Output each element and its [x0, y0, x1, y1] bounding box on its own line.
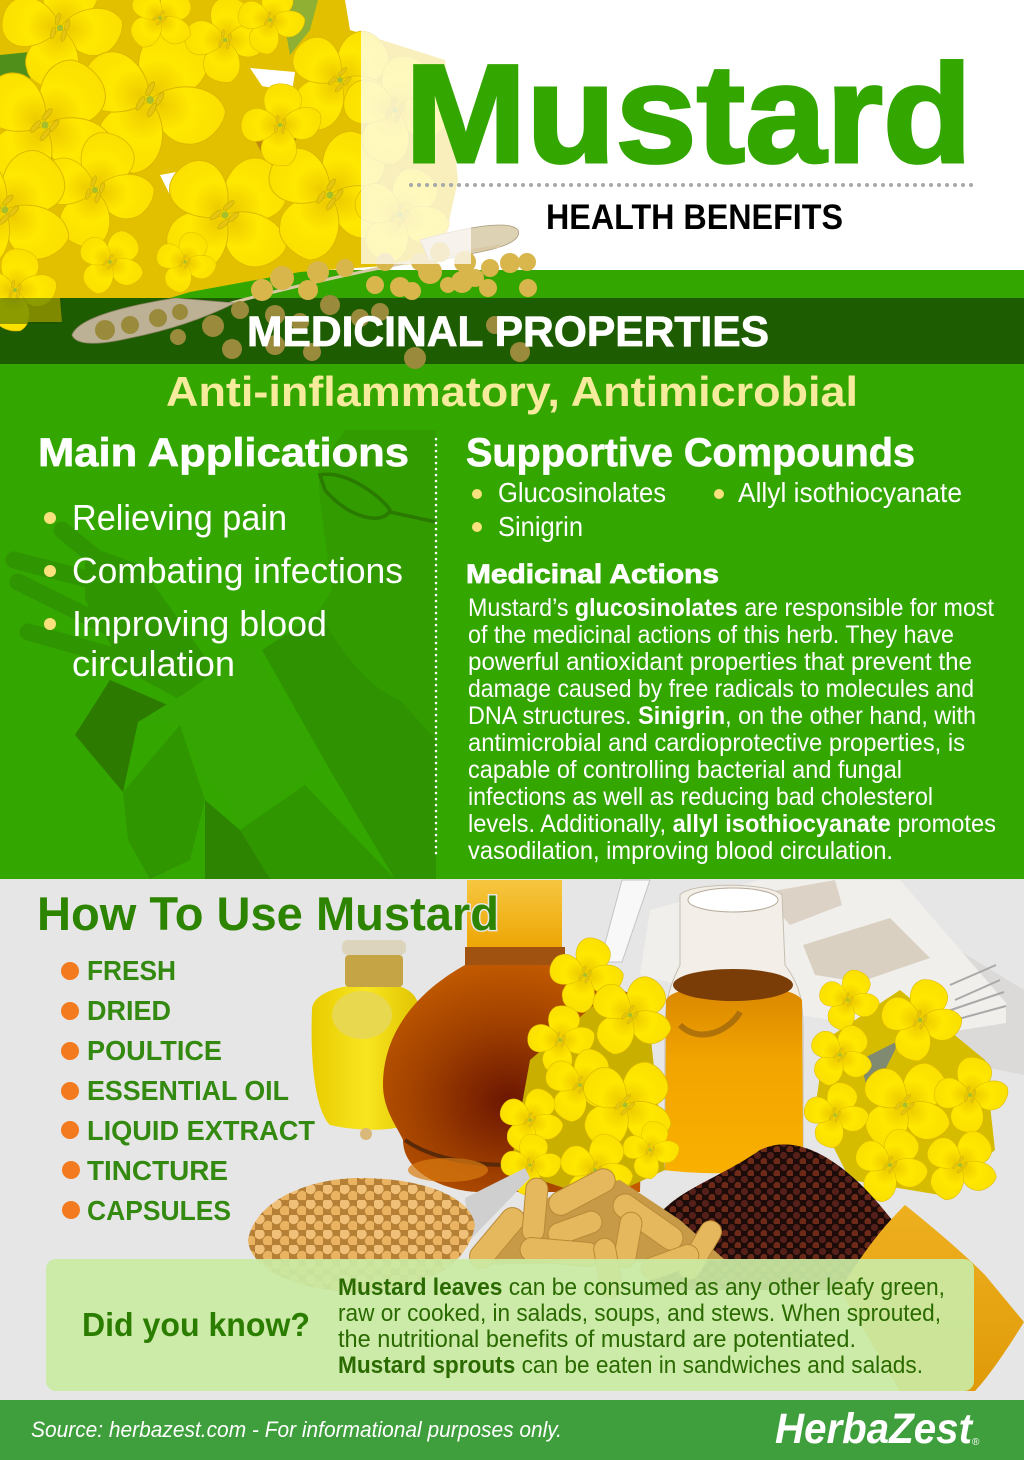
title divider: [411, 183, 974, 187]
image: herbal capsules: [465, 1165, 726, 1299]
medicinal actions paragraph: DNA structures. Sinigrin, on the other hand, with: [468, 702, 976, 730]
panel: white header background: [0, 0, 1024, 270]
subtitle: HEALTH BENEFITS: [546, 198, 843, 237]
usage labels: [87, 955, 315, 1226]
medicinal actions paragraph: Mustard’s glucosinolates are responsible for most: [468, 594, 994, 622]
registered mark: ®: [972, 1437, 980, 1448]
panel: dark medicinal properties band: [0, 298, 1024, 364]
medicinal actions paragraph: infections as well as reducing bad cholesterol: [468, 783, 933, 811]
image: spoon of yellow mustard seeds: [248, 1168, 530, 1292]
panel: woman silhouette photo: [14, 430, 436, 879]
bullet markers: [44, 512, 56, 630]
compound list: Sinigrin: [498, 511, 583, 542]
application list: circulation: [72, 643, 235, 684]
usage labels: ESSENTIAL OIL: [87, 1075, 289, 1106]
source note: Source: herbazest.com - For informational purposes only.: [31, 1417, 562, 1442]
image: turmeric powder: [840, 1205, 1024, 1391]
image: large amber oil flask: [383, 880, 645, 1192]
heading: medicinal actions: Medicinal Actions: [466, 559, 719, 589]
panel: main applications: [38, 431, 409, 684]
heading: medicinal properties: MEDICINAL PROPERTIES: [247, 308, 769, 356]
image: tall glass bottle of oil: [665, 885, 803, 1173]
application list: Improving blood: [72, 603, 327, 644]
image: small yellow oil bottle: [312, 940, 420, 1140]
application list: Combating infections: [72, 550, 403, 591]
callout background: [46, 1259, 974, 1391]
logo: HerbaZest: HerbaZest: [775, 1405, 974, 1453]
knife blade: [600, 880, 650, 962]
image: right flower cluster: [794, 959, 1016, 1220]
heading: main applications: Main Applications: [38, 431, 409, 475]
panel: supportive compounds: [466, 431, 996, 865]
usage labels: POULTICE: [87, 1035, 222, 1066]
medicinal actions paragraph: capable of controlling bacterial and fungal: [468, 756, 902, 784]
heading: supportive compounds: Supportive Compounds: [466, 431, 915, 475]
callout text: raw or cooked, in salads, soups, and stews. When sprouted,: [338, 1300, 941, 1327]
compound list: [498, 477, 962, 542]
medicinal actions paragraph: of the medicinal actions of this herb. They have: [468, 621, 954, 649]
panel: green medicinal background: [0, 270, 1024, 879]
image: mustard patches: [600, 880, 1024, 1075]
usage labels: CAPSULES: [87, 1195, 231, 1226]
medicinal actions paragraph: antimicrobial and cardioprotective properties, is: [468, 729, 965, 757]
medicinal actions paragraph: vasodilation, improving blood circulation.: [468, 837, 893, 865]
title: Mustard: [405, 35, 972, 192]
pale translucent overlay behind title: [361, 30, 471, 264]
medicinal actions paragraph: levels. Additionally, allyl isothiocyanate promotes: [468, 810, 996, 838]
compound list: Glucosinolates: [498, 477, 666, 508]
heading: how to use mustard: How To Use Mustard: [37, 887, 499, 940]
panel: usage forms list: [61, 955, 315, 1226]
callout heading: Did you know?: [82, 1306, 310, 1343]
callout text: Mustard leaves can be consumed as any other leafy green,: [338, 1274, 945, 1301]
image: dark mustard seed pile: [648, 1144, 892, 1290]
usage labels: TINCTURE: [87, 1155, 228, 1186]
image: mustard pod and seeds: [72, 225, 537, 369]
medicinal actions paragraph: damage caused by free radicals to molecules and: [468, 675, 974, 703]
orange bullets: [61, 962, 80, 1219]
compound bullets: [472, 489, 724, 532]
image: central flower cluster: [486, 927, 697, 1223]
callout text: Mustard sprouts can be eaten in sandwiches and salads.: [338, 1352, 923, 1379]
callout text: [338, 1274, 945, 1379]
usage labels: LIQUID EXTRACT: [87, 1115, 315, 1146]
image: yellow mustard flower cluster: [0, 0, 470, 338]
medicinal actions paragraph: powerful antioxidant properties that prevent the: [468, 648, 972, 676]
panel: did you know callout: [46, 1259, 974, 1391]
usage labels: FRESH: [87, 955, 176, 986]
compound list: Allyl isothiocyanate: [738, 477, 962, 508]
callout text: the nutritional benefits of mustard are potentiated.: [338, 1326, 856, 1353]
medicinal actions paragraph: [468, 594, 996, 865]
panel: footer: [0, 1400, 1024, 1460]
application list: [72, 497, 403, 684]
application list: Relieving pain: [72, 497, 287, 538]
subheading: properties list: Anti-inflammatory, Antimicrobial: [166, 368, 858, 415]
panel: how to use background: [0, 879, 1024, 1400]
usage labels: DRIED: [87, 995, 171, 1026]
